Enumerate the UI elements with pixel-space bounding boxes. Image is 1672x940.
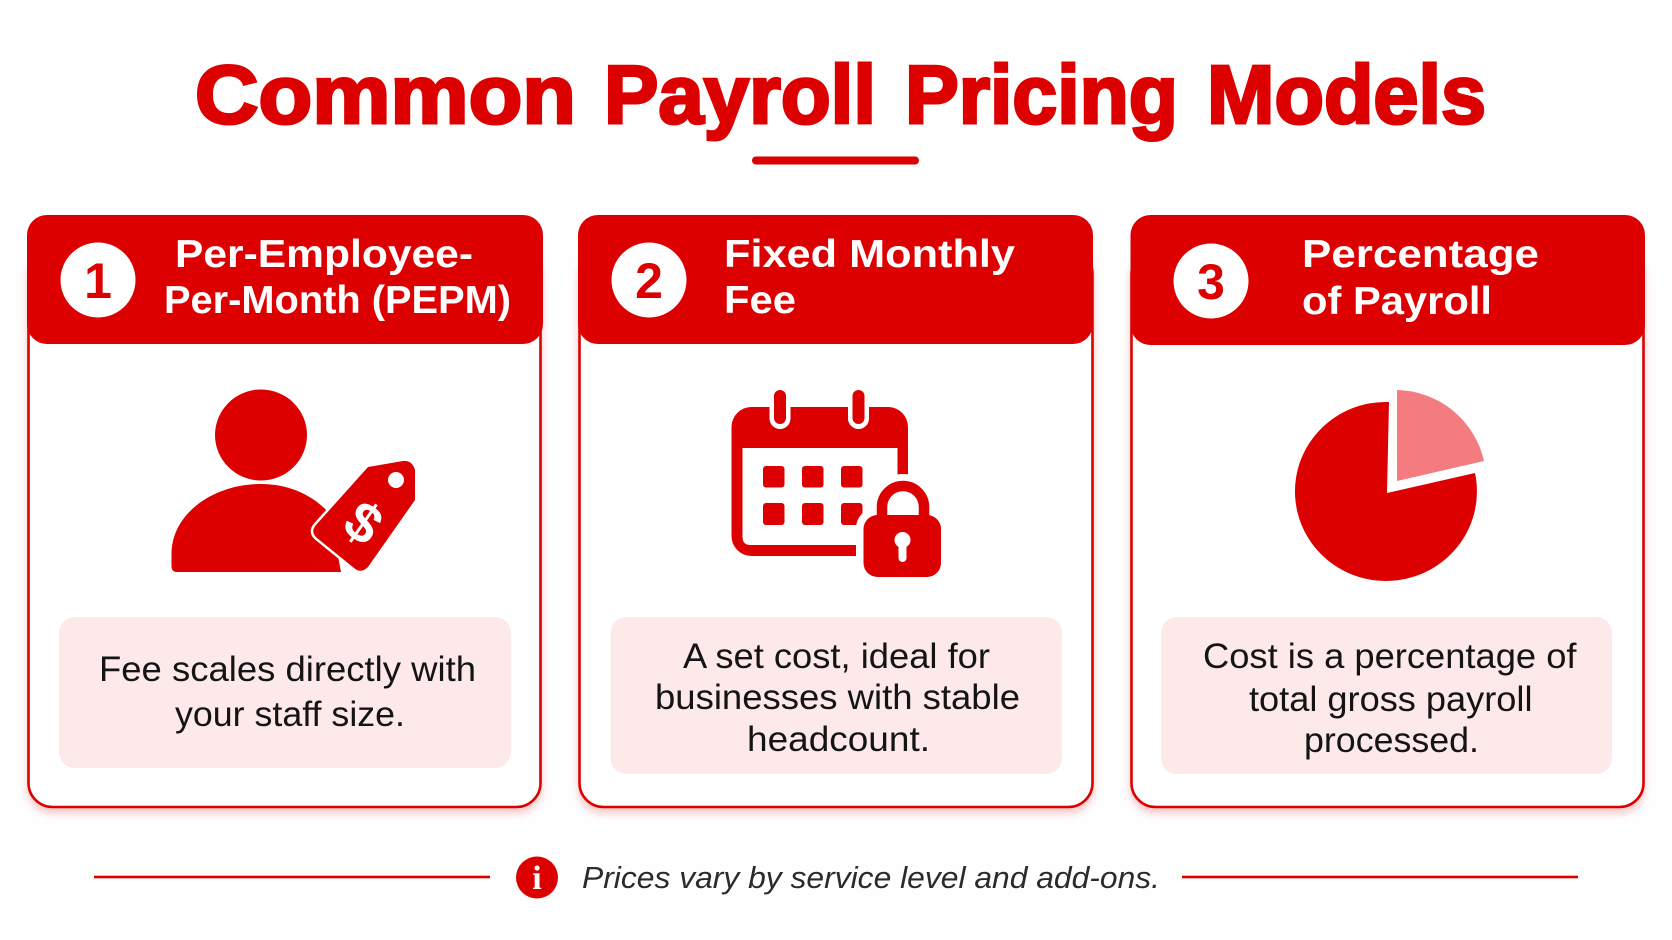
card header: Per-Employee-	[175, 233, 473, 276]
panel: per-employee-per-month	[27, 215, 543, 807]
description box: headcount.	[747, 720, 930, 759]
icon: pie chart	[1295, 390, 1484, 581]
description box	[1161, 617, 1612, 774]
card outline	[1132, 250, 1644, 807]
description box: Cost is a percentage of	[1203, 637, 1577, 676]
panel: percentage of payroll	[1130, 215, 1645, 807]
footer note	[94, 856, 1578, 898]
icon: info	[516, 856, 558, 898]
title underline	[752, 156, 919, 164]
card header: Fee	[724, 279, 796, 322]
icon: info: i	[532, 860, 542, 897]
icon: calendar with lock	[732, 388, 948, 577]
description box: A set cost, ideal for	[683, 637, 990, 676]
card header: 3	[1197, 254, 1225, 310]
card header: Percentage	[1302, 233, 1539, 276]
title: Payroll	[604, 48, 876, 141]
card header	[578, 215, 1093, 344]
card header: of Payroll	[1302, 280, 1492, 323]
icon: person with price tag	[172, 390, 415, 572]
card header	[27, 215, 543, 344]
title: Models	[1207, 48, 1486, 141]
description box: your staff size.	[175, 695, 405, 734]
card header: 2	[635, 253, 663, 309]
card header: Fixed Monthly	[724, 233, 1015, 276]
icon: person with price tag: $	[333, 488, 395, 557]
description box: processed.	[1304, 721, 1479, 760]
card header: 1	[84, 253, 112, 309]
panel: fixed monthly fee	[578, 215, 1093, 807]
description box: businesses with stable	[655, 678, 1020, 717]
footnote text: Prices vary by service level and add-ons.	[582, 860, 1160, 895]
description box	[59, 617, 511, 768]
title: Pricing	[905, 48, 1178, 141]
description box: Fee scales directly with	[99, 650, 476, 689]
title	[195, 48, 1486, 141]
card outline	[580, 250, 1092, 807]
card header: Per-Month (PEPM)	[164, 279, 511, 322]
description box: total gross payroll	[1249, 680, 1532, 719]
card outline	[28, 250, 540, 807]
description box	[610, 617, 1062, 774]
card header	[1130, 215, 1645, 345]
title: Common	[195, 48, 576, 141]
